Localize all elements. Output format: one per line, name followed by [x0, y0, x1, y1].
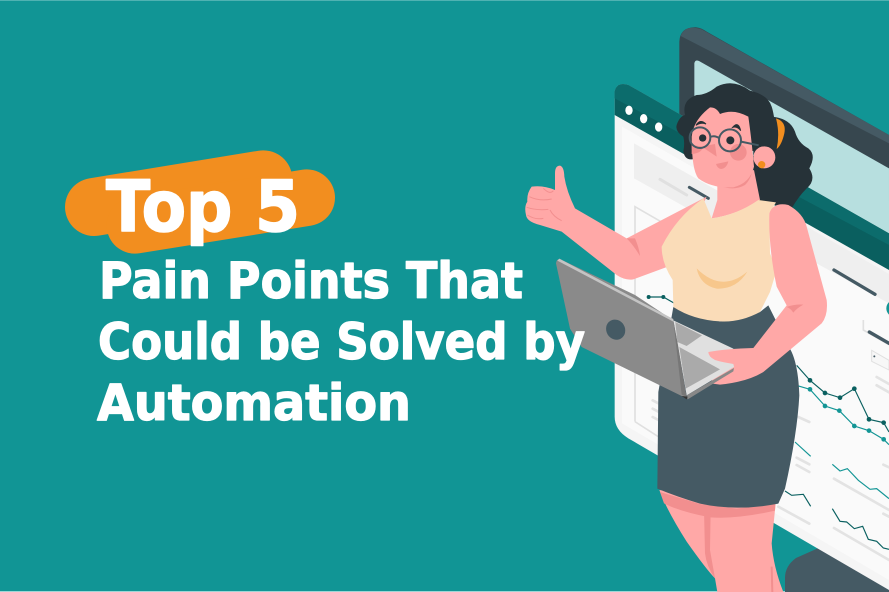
heading: Top 5: Top 5 [106, 166, 300, 248]
illustration: woman holding laptop [525, 83, 827, 592]
badge: orange brush highlight [94, 179, 307, 225]
legs [659, 490, 783, 592]
illustration: monitor [679, 27, 889, 333]
heading: subtitle: Could be Solved by [98, 313, 585, 371]
line chart: dark series [797, 365, 889, 432]
ponytail [753, 117, 813, 208]
heading: subtitle: Automation [97, 374, 411, 432]
heading: subtitle [97, 252, 585, 432]
heading: subtitle: Pain Points That [99, 252, 523, 310]
illustration: stand [785, 546, 889, 592]
supporting arm [711, 204, 827, 385]
sleeveless top [662, 198, 777, 321]
line chart: teal series [798, 386, 889, 445]
skirt [657, 305, 799, 508]
illustration: browser window with charts [615, 84, 889, 590]
laptop [556, 259, 734, 399]
neck [712, 170, 760, 218]
head [676, 83, 785, 187]
fingers over laptop [708, 348, 763, 372]
raised arm and thumbs-up hand [525, 166, 707, 280]
